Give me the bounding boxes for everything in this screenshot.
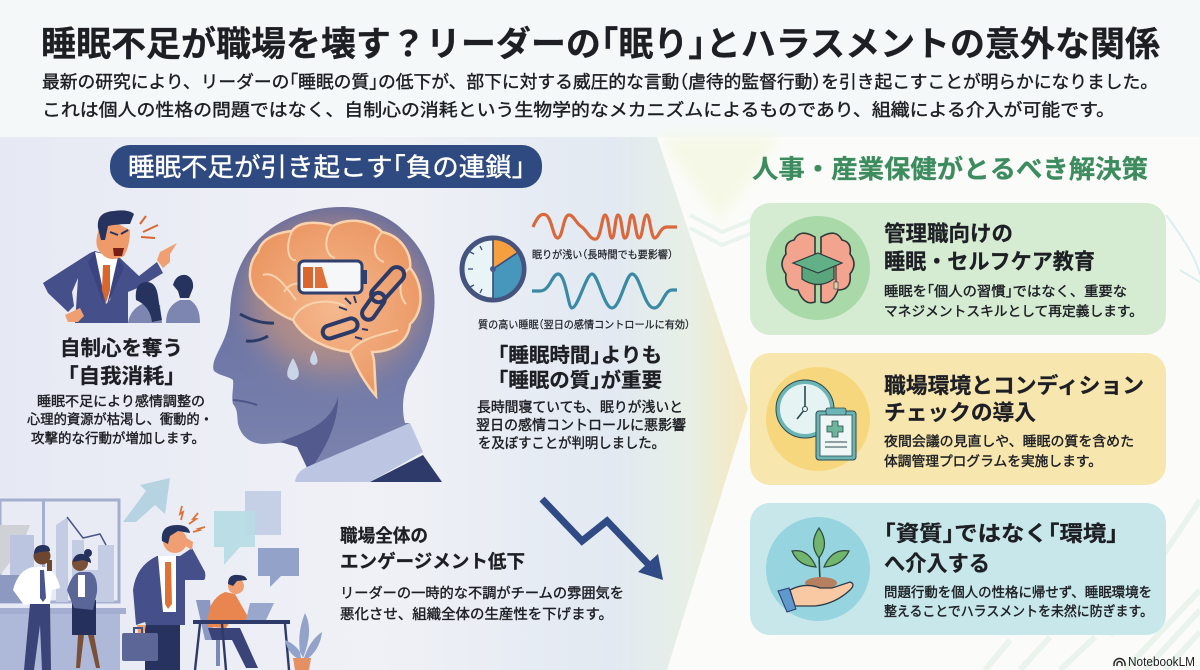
intro text: 最新の研究により、リーダーの「睡眠の質」の低下が、部下に対する威圧的な言動（虐待的監督行動）を引き起こすことが明らかになりました。 [42, 72, 1158, 92]
fists [65, 308, 84, 322]
title: 睡眠不足が職場を壊す？リーダーの「眠り」とハラスメントの意外な関係 [41, 25, 1161, 64]
panel: workplace environment [750, 353, 1166, 485]
text block: sleep quality: 翌日の感情コントロールに悪影響 [476, 417, 686, 433]
heading pill: negative chain: 睡眠不足が引き起こす 「負の連鎖」 [128, 154, 525, 182]
man on the left [13, 545, 60, 670]
illustration: workplace [0, 478, 322, 670]
icon: hand with plant [778, 528, 853, 612]
text block: sleep quality [476, 344, 686, 451]
card text: 職場環境とコンディション [884, 373, 1144, 398]
seated worker [193, 575, 290, 670]
text block: self depletion: 自制心を奪う [60, 337, 183, 360]
tears [287, 350, 318, 380]
brain [250, 221, 420, 396]
card text: 体調管理プログラムを実施します。 [884, 454, 1102, 469]
icon: clock and clipboard [776, 380, 856, 460]
card text [884, 522, 1153, 619]
text block: self depletion: 「自我消耗」 [68, 365, 175, 388]
text block: engagement: リーダーの一時的な不調がチームの雰囲気を [340, 585, 624, 602]
card text [884, 373, 1144, 469]
card text: 管理職向けの [884, 222, 1013, 246]
text block: engagement: エンゲージメント低下 [340, 551, 525, 572]
icon: brain with cap [782, 233, 854, 303]
card text: 夜間会議の見直しや、睡眠の質を含めた [884, 433, 1134, 449]
broken chain [321, 264, 407, 340]
card text: 整えることでハラスメントを未然に防ぎます。 [884, 603, 1153, 619]
left panel [0, 137, 748, 670]
card text: 「資質」ではなく 「環境」 [884, 522, 1118, 546]
text block: sleep quality: 長時間寝ていても、眠りが浅いと [477, 399, 683, 415]
speech bubbles [214, 491, 299, 587]
stressed leader [133, 506, 205, 670]
card text: チェックの導入 [884, 401, 1036, 425]
text block: sleep quality: 「睡眠の質」が重要 [498, 368, 662, 392]
logo: NotebookLM: NotebookLM [1128, 655, 1195, 669]
label: light sleep: 眠りが浅い（長時間でも要影響） [532, 248, 673, 261]
potted plant [285, 613, 322, 670]
text block: sleep quality: を及ぼすことが判明しました。 [478, 435, 665, 451]
intro text [42, 72, 1158, 120]
text block: sleep quality: 「睡眠時間」よりも [498, 344, 662, 367]
icon: clock sleep [462, 238, 524, 300]
panel: intervene in environment [750, 503, 1166, 635]
card text: 問題行動を個人の性格に帰せず、睡眠環境を [884, 584, 1152, 600]
right background [640, 137, 1200, 670]
heading: solutions: 人事・産業保健がとるべき解決策 [752, 155, 1148, 184]
panel: manager education [750, 203, 1166, 335]
card text: へ介入する [884, 552, 990, 576]
text block: self depletion: 睡眠不足により感情調整の [37, 393, 205, 409]
illustration: head with brain [213, 207, 442, 482]
card text: 睡眠を「個人の習慣」ではなく、重要な [884, 283, 1127, 299]
suit [43, 251, 163, 323]
arrow: decline [542, 499, 663, 580]
text block: self depletion [27, 337, 213, 446]
header background [0, 0, 1200, 137]
text block: self depletion: 心理的資源が枯渇し、衝動的・ [27, 412, 213, 427]
heading pill: negative chain [110, 145, 542, 188]
card text: マネジメントスキルとして再定義します。 [884, 303, 1143, 319]
card text: 睡眠・セルフケア教育 [884, 250, 1095, 274]
wave: light sleep [533, 214, 677, 239]
wave: quality sleep [532, 274, 677, 308]
text block: self depletion: 攻撃的な行動が増加します。 [31, 431, 205, 446]
audience [128, 304, 162, 323]
text block: engagement [340, 526, 624, 623]
intro text: これは個人の性格の問題ではなく、自制心の消耗という生物学的なメカニズムによるものであり、組織による介入が可能です。 [42, 100, 1115, 120]
text block: engagement: 悪化させ、組織全体の生産性を下げます。 [340, 606, 613, 623]
briefcase [122, 628, 158, 661]
illustration: angry manager [43, 210, 200, 323]
battery [299, 261, 367, 293]
card text [884, 222, 1143, 319]
text block: engagement: 職場全体の [340, 526, 428, 546]
label: quality sleep: 質の高い睡眠（翌日の感情コントロールに有効） [478, 318, 690, 331]
face [96, 221, 130, 259]
woman [67, 549, 100, 668]
window and buildings [0, 500, 126, 670]
up arrow [123, 478, 170, 522]
